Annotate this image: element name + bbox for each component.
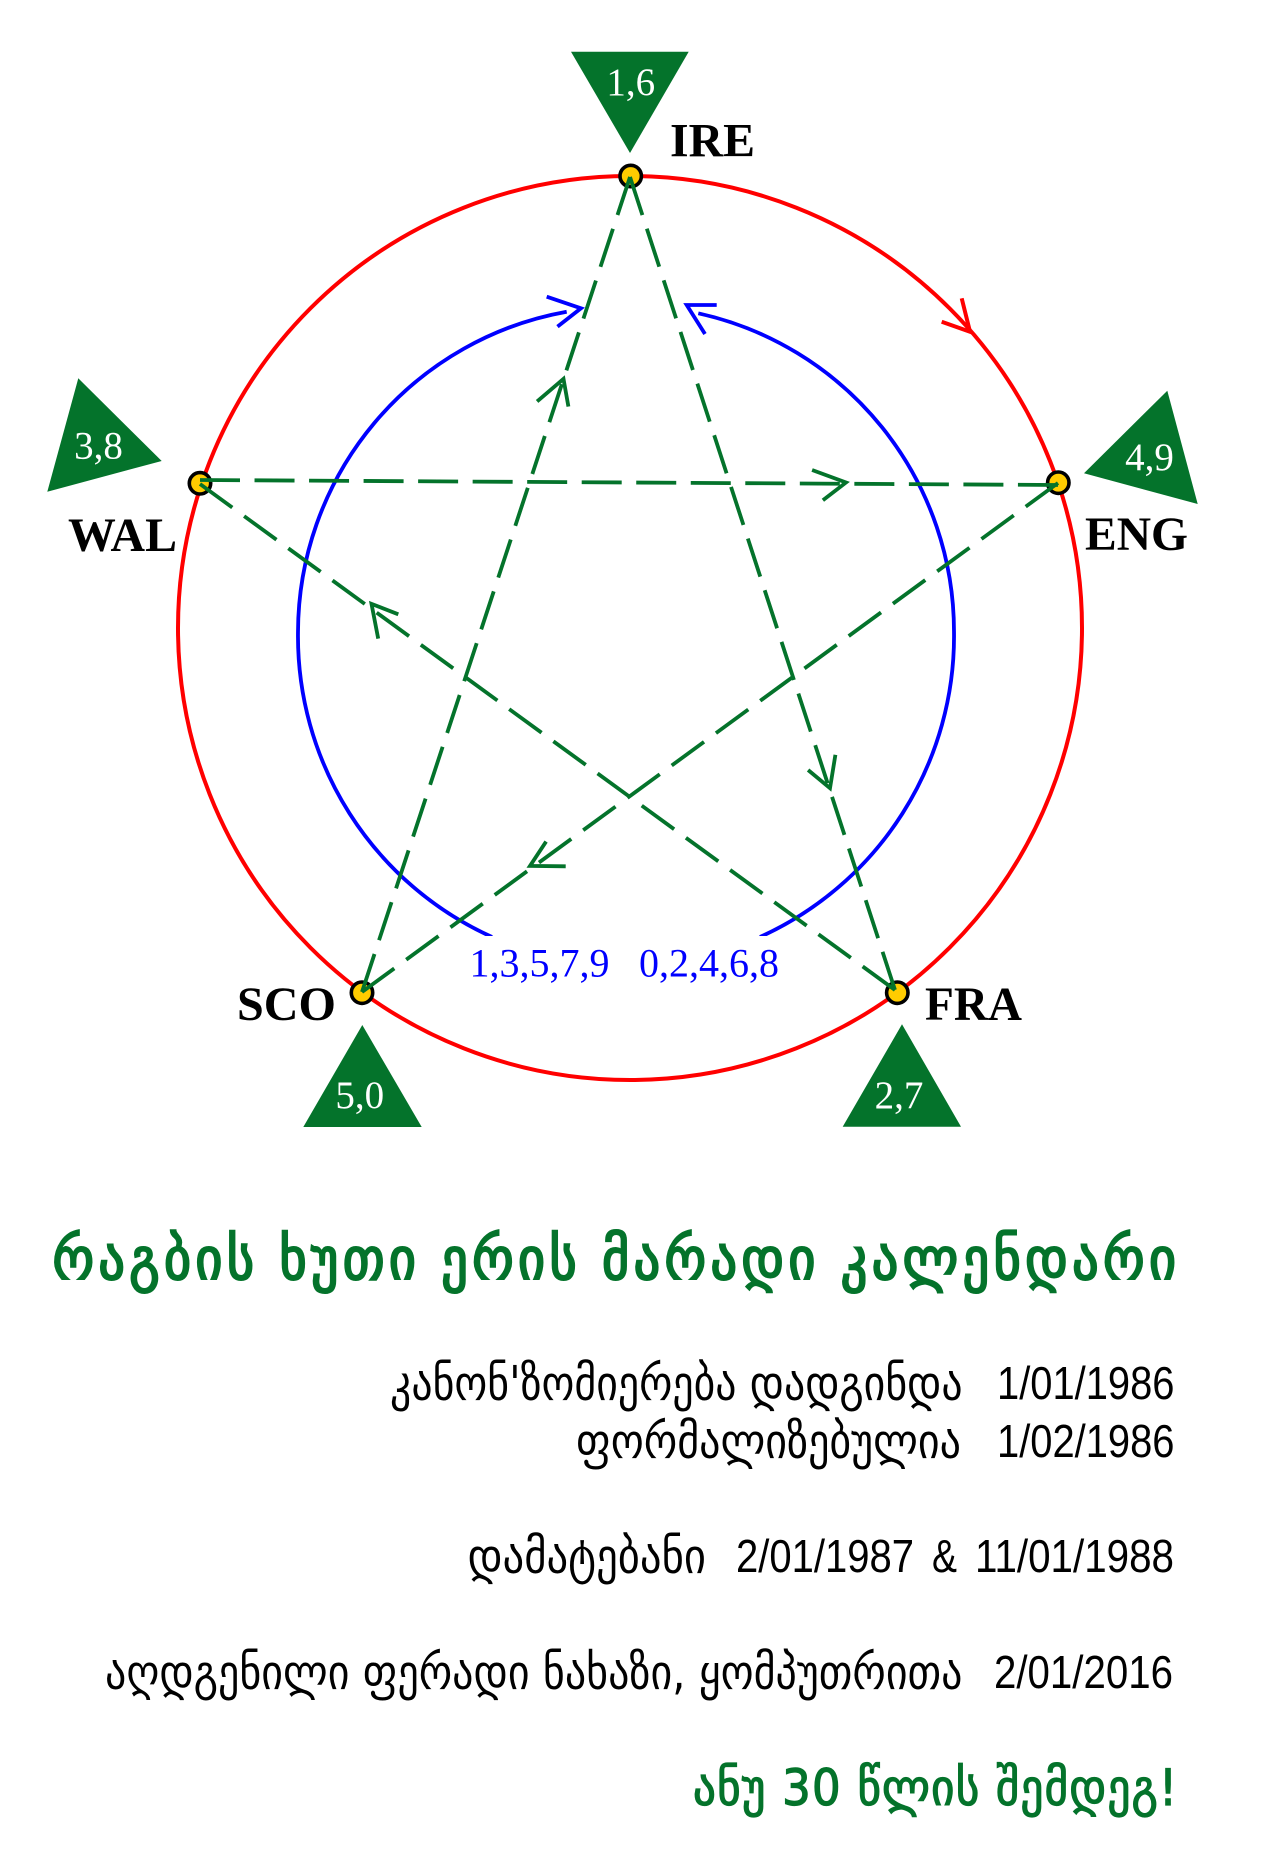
triangle: IRE 1,6: [571, 52, 689, 153]
label: WAL: WAL: [68, 509, 177, 562]
line 2 text: ფორმალიზებულია: [576, 1414, 961, 1470]
even years label: 0,2,4,6,8: [639, 940, 779, 986]
label: ENG: ENG: [1085, 508, 1188, 561]
green dashed pentagram with arrows: [200, 177, 1058, 992]
triangle: ENG 4,9: 4,9: [1125, 436, 1174, 479]
line 3 dates: 11/01/1988: [975, 1530, 1174, 1582]
label: SCO: SCO: [237, 978, 336, 1031]
line 3 dates: [736, 1530, 1174, 1582]
triangle: FRA 2,7: [843, 1024, 961, 1127]
line 4 text: აღდგენილი ფერადი ნახაზი, ყომპუთრითა: [105, 1645, 962, 1701]
triangle: IRE 1,6: 1,6: [606, 61, 655, 104]
label: FRA: FRA: [925, 978, 1022, 1031]
closing green line: ანუ 30 წლის შემდეგ!: [693, 1759, 1177, 1817]
blue inner arcs with arrows: [298, 297, 954, 937]
line 3 dates: &: [932, 1530, 957, 1582]
odd years label: 1,3,5,7,9: [470, 940, 610, 986]
line 4 date: 2/01/2016: [994, 1646, 1173, 1698]
triangle: WAL 3,8: 3,8: [74, 424, 123, 467]
line 2 date: 1/02/1986: [997, 1415, 1174, 1467]
triangle: FRA 2,7: 2,7: [875, 1074, 923, 1117]
line 3 dates: 2/01/1987: [736, 1530, 914, 1582]
triangle: ENG 4,9: [1084, 391, 1198, 504]
triangle: SCO 5,0: 5,0: [335, 1074, 384, 1117]
node markers: [189, 165, 1069, 1003]
label: IRE: IRE: [670, 114, 755, 168]
line 1 date: 1/01/1986: [997, 1357, 1174, 1409]
line 3 text: დამატებანი: [468, 1529, 706, 1585]
triangle: SCO 5,0: [303, 1025, 422, 1127]
line 1 text: კანონ'ზომიერება დადგინდა: [390, 1356, 963, 1412]
red outer circle with direction arrow: [178, 176, 1082, 1080]
triangle: WAL 3,8: [47, 378, 162, 492]
title: რაგბის ხუთი ერის მარადი კალენდარი: [52, 1225, 1176, 1293]
